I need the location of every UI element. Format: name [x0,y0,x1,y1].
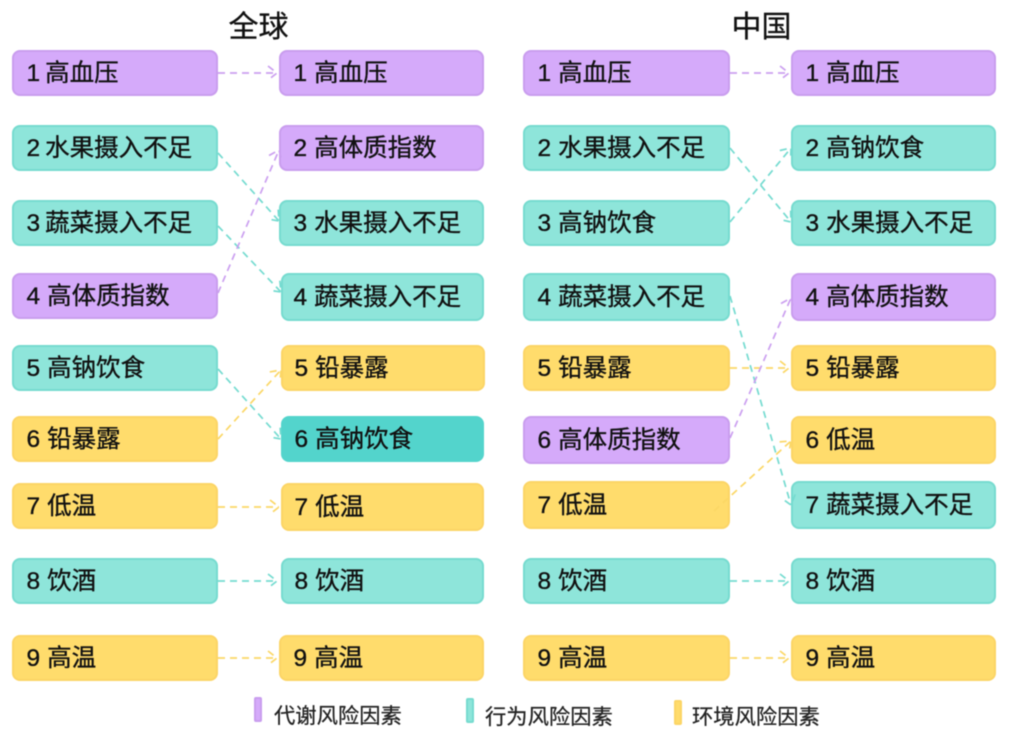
China right 9 [791,635,996,681]
arrow: global fruit [218,153,279,221]
China right 6: 6 [806,427,819,454]
China left 1: 高血压 [558,60,632,87]
arrow: China high temperature [730,657,789,659]
arrow: China lead [730,367,789,369]
global right 5 [281,345,485,391]
arrow: global lead [218,370,281,439]
global right 6: 6 [294,426,308,453]
panel: China ranking right column [790,50,997,682]
legend [254,696,820,729]
panel: China ranking left column [522,50,731,682]
China left 6: 6 [538,427,551,454]
China right 8: 饮酒 [826,568,875,595]
global left 9 [12,635,218,681]
global left 8: 8 [26,568,40,595]
China left 9 [523,635,730,681]
global right 9: 9 [294,645,307,672]
arrow: China fruit [730,148,791,222]
China left 8: 8 [538,568,551,595]
global left 3: 3 [26,210,40,237]
panel: global ranking right column [278,50,486,682]
China right 8 [791,558,996,604]
global right 6 [281,416,484,462]
China right 1 [791,50,996,96]
global left 7: 低温 [47,493,96,520]
global right 1 [279,50,484,96]
legend swatch: metabolic [254,697,262,722]
heading: China: 中国 [732,11,792,44]
China right 4: 高体质指数 [826,284,949,311]
global right 3: 3 [294,210,307,237]
global right 5: 铅暴露 [315,355,389,382]
global right 9 [279,635,484,681]
global left 9: 9 [26,645,40,672]
China left 5: 铅暴露 [558,355,632,382]
global left 7 [12,483,218,529]
China left 7: 7 [538,492,551,519]
global left 6: 6 [26,426,40,453]
global left 4 [12,273,218,319]
China left 8 [523,558,730,604]
global left 2: 2 [26,135,40,162]
global right 9: 高温 [314,645,363,672]
China left 7: 低温 [558,492,607,519]
China left 6: 高体质指数 [558,427,681,454]
heading: global: 全球 [228,11,288,44]
global left 6: 铅暴露 [47,426,121,453]
China left 5: 5 [538,355,551,382]
global right 8: 饮酒 [315,568,364,595]
China left 9: 9 [538,645,551,672]
global right 5: 5 [294,355,308,382]
China left 3 [523,200,730,246]
China right 4 [791,273,996,321]
China right 3: 3 [806,210,819,237]
China left 8: 饮酒 [558,568,607,595]
China left 3: 3 [538,210,551,237]
global right 2 [279,125,484,171]
China right 7: 蔬菜摄入不足 [826,492,973,519]
global left 9: 高温 [47,645,96,672]
China left 5 [523,345,730,391]
China right 1: 高血压 [826,60,900,87]
China right 2: 2 [806,135,819,162]
global right 4 [281,273,484,321]
legend swatch: environmental [674,700,682,725]
arrow: global BMI [218,150,279,293]
China right 5 [791,345,996,391]
global left 5: 5 [26,355,40,382]
global left 8 [12,558,218,604]
global right 1: 高血压 [314,60,388,87]
global left 3: 蔬菜摄入不足 [45,210,192,237]
global left 7: 7 [26,493,40,520]
global left 1: 1 [26,60,40,87]
China right 7 [791,481,996,529]
arrow: global high temperature [218,657,277,659]
China left 4: 蔬菜摄入不足 [558,284,705,311]
global left 5: 高钠饮食 [47,355,145,382]
global right 6: 高钠饮食 [315,426,413,453]
global left 1 [12,50,218,96]
global left 8: 饮酒 [47,568,96,595]
China right 2 [791,125,996,171]
China right 5: 5 [806,355,819,382]
China right 6: 低温 [826,427,875,454]
China left 7 [523,481,730,529]
China left 3: 高钠饮食 [558,210,656,237]
China right 3 [791,200,996,246]
global right 7: 7 [294,494,308,521]
arrow: China high blood pressure [730,72,789,74]
global right 8 [281,558,484,604]
legend label: environmental: 环境风险因素 [692,705,820,729]
global left 4: 4 [26,283,40,310]
global left 1: 高血压 [45,60,119,87]
arrow: global low temperature [218,506,279,508]
arrow: China alcohol [730,580,789,582]
global right 7: 低温 [315,494,364,521]
global right 3: 水果摄入不足 [314,210,461,237]
global left 4: 高体质指数 [47,283,170,310]
China left 4 [523,273,730,321]
global right 1: 1 [294,60,307,87]
global right 4: 蔬菜摄入不足 [314,284,461,311]
China right 1: 1 [806,60,819,87]
arrow: global sodium [218,369,281,439]
arrow: China vegetables [730,296,791,505]
China left 2: 2 [538,135,551,162]
China right 2: 高钠饮食 [826,135,924,162]
global left 2: 水果摄入不足 [45,135,192,162]
arrow: China sodium [730,148,791,222]
global right 2: 高体质指数 [314,135,437,162]
China right 3: 水果摄入不足 [826,210,973,237]
China right 5: 铅暴露 [826,355,900,382]
arrow: China BMI [730,298,791,438]
China left 4: 4 [538,284,551,311]
China right 9: 高温 [826,645,875,672]
China right 9: 9 [806,645,819,672]
China right 8: 8 [806,568,819,595]
China right 6 [791,416,996,464]
global left 2 [12,125,218,171]
China left 2: 水果摄入不足 [558,135,705,162]
arrow: China low temperature [714,441,791,511]
global right 4: 4 [294,284,307,311]
global right 3 [279,200,484,246]
global right 2: 2 [294,135,307,162]
global right 8: 8 [294,568,308,595]
China left 1 [523,50,730,96]
China left 2 [523,125,730,171]
China right 4: 4 [806,284,819,311]
China right 7: 7 [806,492,819,519]
legend label: behavioral: 行为风险因素 [485,705,613,729]
China left 6 [523,416,730,464]
global left 5 [12,345,218,391]
global right 7 [281,483,484,531]
arrow: global high blood pressure [218,72,277,74]
arrow: global alcohol [218,580,277,582]
legend swatch: behavioral [466,698,474,723]
China left 1: 1 [538,60,551,87]
China left 9: 高温 [558,645,607,672]
legend label: metabolic: 代谢风险因素 [274,704,402,728]
global left 6 [12,416,218,462]
arrow: global vegetables [218,226,281,292]
global left 3 [12,200,218,246]
panel: global ranking left column [11,50,219,682]
